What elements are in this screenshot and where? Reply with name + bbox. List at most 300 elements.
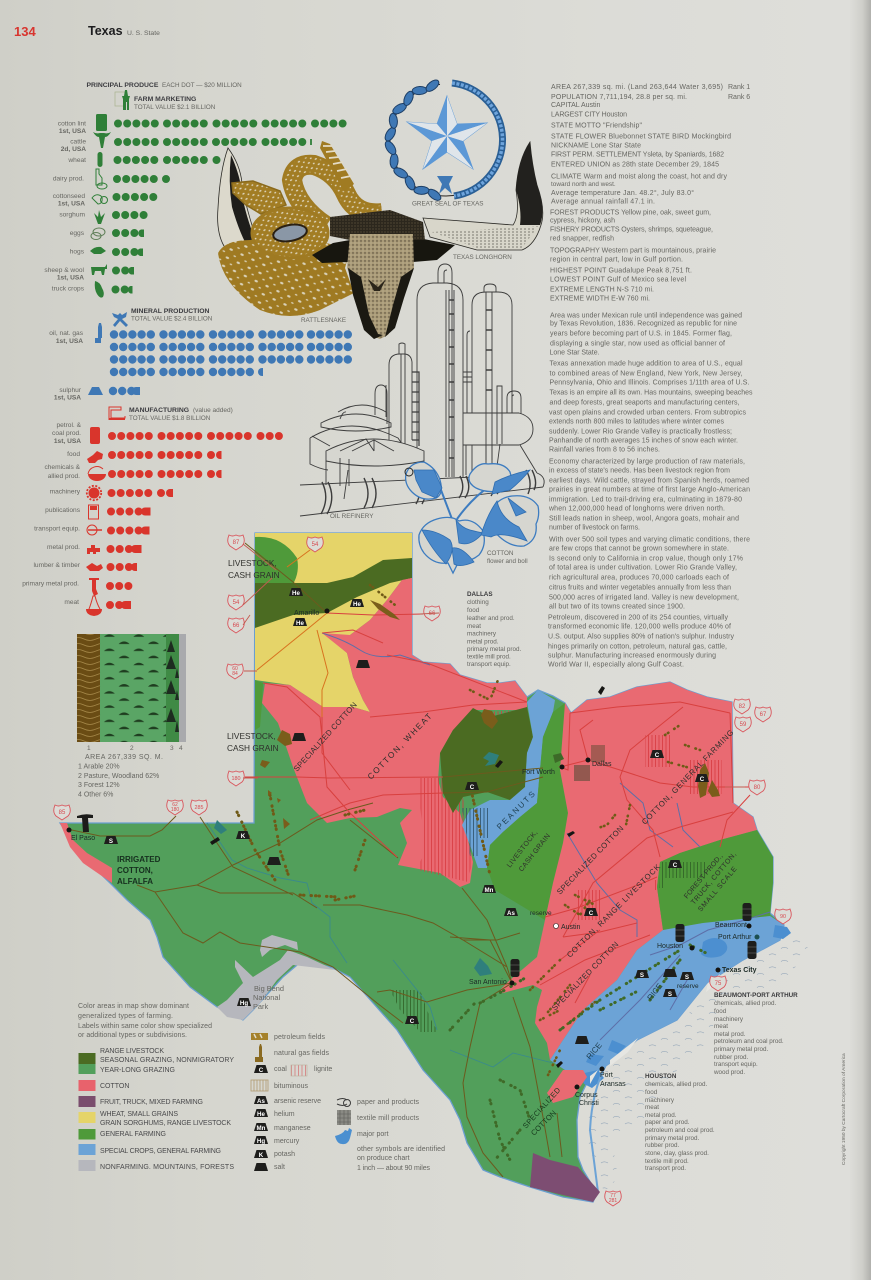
houston industry list [645, 1073, 715, 1172]
legend: mineral symbols: manganese [274, 1125, 311, 1132]
panel: descriptive text: Area was under Mexican rule until independence was gained [550, 312, 742, 320]
icon: textile mill [337, 1110, 351, 1125]
region: fruit, truck, mixed farming [530, 1153, 600, 1202]
panel: descriptive text: years before becoming part of U.S. in 1845. Former flag, [550, 330, 732, 338]
region: big bend nonfarming [217, 935, 335, 1020]
highway shields: 80 [754, 785, 761, 791]
beaumont-port arthur industry list: rubber prod. [714, 1054, 749, 1061]
legend: industry symbols: major port [357, 1131, 389, 1138]
panel: descriptive text: earliest days. Wild cattle, strayed from Spanish herds, roamed [549, 478, 749, 484]
icon: petroleum fields [251, 1033, 268, 1040]
panel: descriptive text: rich agricultural area, produces 70,000 carloads each of [549, 574, 729, 582]
beaumont-port arthur industry list: BEAUMONT-PORT ARTHUR [714, 992, 798, 999]
star [407, 96, 487, 169]
farm marketing heading: FARM MARKETING [134, 96, 196, 103]
state base: year-long grazing [60, 533, 784, 1202]
manufacturing rows: allied prod. [48, 473, 80, 480]
legend: mineral symbols: natural gas fields [274, 1050, 330, 1057]
farm row labels: cottonseed [53, 193, 85, 200]
mineral symbols: S [640, 972, 644, 979]
farming region labels: COTTON, WHEAT [365, 711, 434, 781]
houston industry list: primary metal prod. [645, 1135, 699, 1142]
legend: mineral symbols: coal [274, 1066, 287, 1073]
mineral symbols: C [589, 910, 594, 917]
mineral production heading [112, 308, 213, 327]
legend: industry symbols: paper and products [357, 1099, 420, 1106]
panel: state facts: FISHERY PRODUCTS Oysters, shrimps, squeteague, [550, 226, 713, 234]
mineral symbols: K [241, 833, 246, 840]
city labels: Port Arthur [718, 934, 752, 941]
chart axis numbers: 1 [87, 745, 91, 752]
city labels: Aransas [600, 1081, 626, 1088]
panel: descriptive text: Panhandle of north averages 15 inches of snow each winter. [549, 438, 738, 444]
houston industry list: meat [645, 1104, 659, 1111]
legend: farming types: COTTON [100, 1083, 129, 1090]
panel: descriptive text: suddenly. Lower Rio Grande Valley is practically frostless; [549, 428, 732, 436]
caption: rattlesnake: RATTLESNAKE [301, 317, 346, 324]
farm row labels: hogs [70, 248, 85, 256]
manufacturing rows: publications [45, 507, 81, 514]
farming region labels: SMALL SCALE [697, 866, 739, 913]
open flower [490, 496, 539, 546]
boll [419, 517, 484, 573]
panel: state facts: CAPITAL Austin [551, 102, 601, 109]
legend: mineral symbols: He [257, 1111, 266, 1118]
legend: mineral symbols: Mn [257, 1125, 266, 1132]
mineral rows: sulphur [59, 387, 82, 394]
panel: state facts [550, 84, 750, 302]
panel: state facts: EXTREME LENGTH N-S 710 mi. [550, 286, 654, 294]
farming region labels: LIVESTOCK, [506, 829, 539, 869]
beaumont-port arthur industry list: machinery [714, 1016, 744, 1023]
city labels: Christi [579, 1100, 599, 1107]
beaumont-port arthur industry list: primary metal prod. [714, 1046, 768, 1053]
panel: descriptive text: With over 500 soil types and varying climatic conditions, there [549, 536, 750, 544]
panel: state facts: region in central part, low in Gulf portion. [550, 256, 683, 264]
panel: descriptive text: Economy characterized by large production of raw materials, [549, 458, 745, 466]
legend note: or additional types or subdivisions. [78, 1032, 187, 1039]
illustration: longhorn horns [218, 142, 543, 254]
city labels: National [253, 993, 280, 1002]
panel: descriptive text: citrus fruits and winter vegetables annually from less than [549, 584, 731, 592]
mineral symbols: S [685, 974, 689, 981]
panel: state facts: Rank 1 [728, 84, 750, 91]
panel: descriptive text: extends north 800 miles to latitudes where winter comes [549, 418, 724, 426]
panel: descriptive text: Rainfall varies from 8 to 56 inches. [549, 446, 660, 454]
eye of coil [272, 222, 308, 244]
mineral symbols: Mn [485, 887, 494, 894]
manufacturing heading: (value added) [193, 407, 233, 414]
region: west cotton [262, 578, 527, 887]
middle coil [252, 208, 328, 258]
page number: 134 [14, 24, 36, 39]
city labels: Big Bend [254, 984, 284, 993]
legend: mineral symbols [251, 1033, 332, 1171]
dallas industry list: DALLAS [467, 591, 493, 598]
region: coastal special crops [550, 916, 784, 1077]
panel: descriptive text: to combined areas of New England, New York, New Jersey, [550, 370, 743, 378]
gulf of mexico waves [584, 932, 810, 1192]
chart heading: EACH DOT — $20 MILLION [162, 82, 242, 89]
houston industry list: metal prod. [645, 1112, 677, 1119]
city labels: El Paso [71, 835, 95, 842]
houston industry list: rubber prod. [645, 1142, 680, 1149]
farm row labels: 1st, USA [58, 200, 85, 208]
houston industry list: machinery [645, 1097, 675, 1104]
legend: industry symbols: on produce chart [357, 1155, 410, 1162]
farm row labels: cotton lint [58, 120, 86, 128]
rattle [320, 141, 354, 192]
illustration: oil refinery [300, 264, 544, 520]
highway shields: 66 [429, 611, 436, 617]
farm row labels: wheat [67, 157, 86, 164]
legend note: Color areas in map show dominant [78, 1003, 189, 1010]
panel: descriptive text: Petroleum, discovered in 200 of its 254 counties, virtually [548, 614, 728, 622]
panel: state facts: LOWEST POINT Gulf of Mexico sea level [550, 276, 686, 284]
panel: descriptive text: are few crops that cannot be grown somewhere in state. [549, 546, 729, 552]
farm row labels: eggs [70, 230, 85, 237]
beaumont-port arthur industry list: metal prod. [714, 1031, 746, 1038]
highway shields: 66 [233, 623, 240, 629]
highway shields: 60 [232, 666, 238, 672]
manufacturing rows: meat [64, 599, 79, 606]
panel: state facts: AREA 267,339 sq. mi. (Land 263,644 Water 3,695) [551, 84, 723, 91]
region: corpus christi cotton [547, 1070, 587, 1103]
highway shields: 62 [172, 802, 178, 808]
farming region labels: LIVESTOCK, [228, 558, 277, 568]
panel: state facts: FIRST PERM. SETTLEMENT Ysleta, by Spaniards, 1682 [551, 152, 724, 158]
lakes and rivers [207, 633, 700, 1067]
manufacturing rows: coal prod. [52, 430, 81, 437]
panel: state facts: red snapper, redfish [550, 236, 614, 242]
dallas industry list: clothing [467, 599, 489, 606]
houston industry list: HOUSTON [645, 1073, 677, 1080]
dallas industry list: meat [467, 623, 481, 630]
farming region labels: SPECIALIZED COTTON [292, 700, 359, 773]
mineral symbols: He [353, 601, 362, 608]
farming region labels: RICE [645, 982, 664, 1002]
manufacturing rows: lumber & timber [33, 562, 81, 569]
panel: principal produce chart [22, 82, 348, 616]
legend: mineral symbols: C [259, 1067, 264, 1074]
highway shields: 281 [609, 1198, 617, 1204]
map of Texas [54, 533, 791, 1206]
panel: descriptive text: all but two of its towns created since 1900. [549, 604, 685, 610]
legend: farming types [78, 1048, 234, 1171]
city labels: Austin [561, 924, 581, 931]
manufacturing rows: transport equip. [34, 526, 80, 532]
panel: descriptive text: Pennsylvania, Ohio and Illinois. Comprises 1/11th area of U.S. [550, 380, 750, 386]
illustration: cotton flower and boll [405, 462, 539, 573]
panel: state facts: CLIMATE Warm and moist along the coast, hot and dry [551, 174, 728, 180]
panel: descriptive text: vast open plains and crowded urban centers. From subtropics [549, 410, 746, 416]
farm row labels: sheep & wool [44, 267, 85, 274]
beaumont-port arthur industry list: meat [714, 1023, 728, 1030]
panel: state facts: NICKNAME Lone Star State [551, 142, 641, 150]
farming region labels: COTTON, [117, 866, 153, 875]
mineral rows: 1st, USA [56, 338, 83, 345]
chart axis numbers: 3 [170, 745, 174, 752]
region: forest products east [657, 830, 773, 930]
land use caption: 3 Forest 12% [78, 782, 120, 789]
panel: descriptive text: 500,000 acres of irrigated land. Valley is new development, [549, 594, 739, 602]
farming region labels: CASH GRAIN [228, 570, 280, 580]
legend: mineral symbols: mercury [274, 1138, 300, 1145]
farming region labels: COTTON, RANGE LIVESTOCK [565, 862, 662, 959]
dallas industry list: textile mill prod. [467, 654, 511, 660]
manufacturing rows: metal prod. [47, 544, 80, 551]
panel: descriptive text: sulphur. Manufacturing increased enormously during [548, 652, 716, 660]
farm marketing heading: TOTAL VALUE $2.1 BILLION [134, 104, 216, 111]
legend note [78, 1003, 212, 1039]
city labels: San Antonio [469, 979, 507, 986]
mineral production heading: TOTAL VALUE $2.4 BILLION [131, 316, 213, 322]
dallas industry list: leather and prod. [467, 615, 515, 622]
mineral production heading: MINERAL PRODUCTION [131, 308, 210, 315]
chart axis numbers [87, 745, 183, 752]
legend note: generalized types of farming. [78, 1013, 173, 1020]
chart heading: PRINCIPAL PRODUCE [86, 82, 159, 89]
icon: farmer [115, 90, 130, 110]
houston industry list: chemicals, allied prod. [645, 1081, 708, 1088]
chart axis numbers: 4 [179, 745, 183, 752]
region: peanuts special crops [462, 690, 555, 868]
highway shields: 90 [780, 914, 786, 920]
highway shields: 82 [739, 704, 746, 710]
farming region labels: RICE [585, 1041, 604, 1061]
chart axis numbers: 2 [130, 745, 134, 752]
manufacturing rows: petrol. & [56, 422, 82, 429]
farm row labels: 1st, USA [59, 128, 86, 135]
dallas industry list: transport equip. [467, 661, 511, 668]
region: wheat and grain sorghums [255, 533, 412, 712]
houston industry list: food [645, 1089, 658, 1096]
legend: industry symbols: textile mill products [357, 1115, 420, 1122]
panel: descriptive text: immigration. Led to trail-driving era, culminating in 1879-80 [549, 496, 742, 504]
region: range livestock central [440, 707, 533, 813]
panel: state facts: TOPOGRAPHY Western part is mountainous, prairie [550, 248, 716, 254]
farm row labels: 1st, USA [57, 274, 84, 282]
city labels: reserve [677, 983, 699, 990]
city labels: Beaumont [715, 922, 747, 929]
panel: state facts: Average annual rainfall 47.1 in. [551, 198, 655, 206]
city labels: Amarillo [294, 610, 319, 617]
hatch: lignite southwest [390, 990, 438, 1032]
panel: state facts: EXTREME WIDTH E-W 760 mi. [550, 296, 650, 302]
legend: industry symbols: 1 inch — about 90 miles [357, 1165, 430, 1172]
panel: descriptive text: transformed economic life. 120,000 wells produce 40% of [548, 624, 731, 630]
legend: industry symbols [335, 1098, 445, 1172]
title [88, 24, 160, 38]
panel: descriptive text [548, 312, 753, 668]
region: general farming northwest panhandle [255, 537, 298, 584]
city labels: Dallas [592, 761, 612, 768]
city labels: Port [600, 1072, 613, 1079]
panel: descriptive text: Still leads nation in sheep, wool, Angora goats, mohair and [549, 516, 739, 522]
icon: gas derrick [255, 1044, 263, 1062]
region: east cotton [500, 682, 757, 1060]
mineral symbols: As [507, 910, 516, 917]
mineral rows [49, 323, 348, 402]
land use caption: AREA 267,339 SQ. M. [85, 754, 163, 761]
icon: sulphur [88, 387, 103, 395]
title: U. S. State [127, 30, 160, 37]
upper loop [292, 165, 382, 226]
beaumont-port arthur industry list: food [714, 1008, 727, 1015]
legend: mineral symbols: petroleum fields [274, 1034, 326, 1041]
land use caption: 4 Other 6% [78, 792, 113, 798]
hatch: bituminous coal [418, 778, 472, 882]
panel: descriptive text: displaying a single star, now used as official banner of [550, 340, 725, 348]
barrier island [590, 1063, 607, 1192]
panel: state facts: ENTERED UNION as 28th state December 29, 1845 [551, 162, 719, 168]
dallas industry list: food [467, 607, 480, 614]
farming region labels: COTTON [529, 1108, 558, 1137]
highway shields: 180 [232, 776, 240, 782]
farming region labels [117, 558, 739, 1137]
houston industry list: paper and prod. [645, 1119, 690, 1126]
city labels: Texas City [722, 967, 757, 974]
panel: descriptive text: prairies in great numbers at time of first large Anglo-American [549, 486, 750, 494]
icon: crossed hammers [112, 312, 128, 327]
highway shields: 59 [740, 722, 747, 728]
caption: oil refinery: OIL REFINERY [330, 513, 374, 520]
panel: descriptive text: U.S. output. Also supplies 80% of nation's sulphur. Industry [548, 634, 734, 640]
panel: state facts: HIGHEST POINT Guadalupe Peak 8,751 ft. [550, 268, 692, 274]
wreath [381, 75, 511, 205]
panel: state facts: Average temperature Jan. 48.2°, July 83.0° [551, 189, 694, 197]
panel: descriptive text: when 12,000,000 head of longhorns were driven north. [548, 506, 725, 512]
caption: longhorn: TEXAS LONGHORN [453, 254, 512, 261]
legend: farming types: GRAIN SORGHUMS, RANGE LIVESTOCK [100, 1120, 231, 1127]
legend note: Labels within same color show specialized [78, 1023, 212, 1030]
legend: farming types: SPECIAL CROPS, GENERAL FARMING [100, 1148, 221, 1155]
seal caption: GREAT SEAL OF TEXAS [412, 200, 484, 208]
legend: farming types: SEASONAL GRAZING, NONMIGRATORY [100, 1057, 234, 1064]
bays [580, 925, 791, 1088]
farming region labels: TRUCK, COTTON, [690, 851, 738, 906]
manufacturing rows: primary metal prod. [22, 580, 79, 588]
mineral symbols: C [470, 784, 475, 791]
farming region labels: FOREST PROD., [683, 853, 725, 900]
region: livestock cash grain strip [487, 703, 568, 920]
oil and gas fields [237, 585, 720, 1160]
land use caption: 1 Arable 20% [78, 764, 120, 770]
panel: descriptive text: Texas annexation made huge addition to area of U.S., equal [550, 360, 743, 368]
city labels: reserve [530, 910, 552, 917]
farm row labels: sorghum [59, 212, 86, 218]
city labels [71, 610, 757, 1107]
highway shields: 77 [610, 1193, 616, 1199]
mineral rows: 1st, USA [54, 394, 81, 402]
panel: descriptive text: in excess of state's needs. Has been livestock region from [549, 468, 730, 474]
highway shields: 54 [312, 542, 319, 548]
panel: descriptive text: hinges primarily on cotton, petroleum, natural gas, cattle, [548, 644, 727, 650]
city markers [66, 608, 760, 1090]
icon: paper rolls [337, 1098, 347, 1106]
houston industry list: transport prod. [645, 1165, 686, 1172]
chart heading [86, 82, 242, 89]
flower buds [406, 462, 441, 499]
legend: farming types: RANGE LIVESTOCK [100, 1048, 164, 1055]
icon: major port [335, 1128, 352, 1144]
panel: descriptive text: Lone Star State. [550, 350, 600, 356]
manufacturing rows: food [67, 451, 80, 458]
legend: farming types: GENERAL FARMING [100, 1131, 166, 1138]
land use caption [78, 754, 163, 798]
city labels: Park [253, 1002, 269, 1011]
highway shields: 54 [233, 600, 240, 606]
farming region labels: CASH GRAIN [227, 743, 279, 753]
mineral symbols: C [673, 862, 678, 869]
legend: farming types: NONFARMING. MOUNTAINS, FORESTS [100, 1164, 234, 1171]
panel: descriptive text: Is second only to California in crop value, though only 17% [549, 556, 743, 562]
highway shields [54, 535, 791, 1206]
houston industry list: petroleum and coal prod. [645, 1127, 715, 1134]
icon: oil derrick [95, 323, 102, 343]
mineral symbols: C [655, 752, 660, 759]
panel: state facts: LARGEST CITY Houston [551, 112, 627, 118]
highway shields: 87 [233, 540, 240, 546]
panel: descriptive text: Texas is an empire all its own. Has mountains, sweeping beaches [550, 390, 753, 396]
farm row labels: 2d, USA [61, 146, 86, 153]
mineral symbols [77, 588, 756, 1068]
manufacturing heading: TOTAL VALUE $1.8 BILLION [129, 415, 211, 422]
panel: state facts: STATE FLOWER Bluebonnet STATE BIRD Mockingbird [551, 134, 731, 140]
farm row labels: cattle [70, 138, 86, 146]
illustration: longhorn head [312, 210, 455, 339]
farming region labels: LIVESTOCK, [227, 731, 276, 741]
beaumont-port arthur industry list: petroleum and coal prod. [714, 1038, 784, 1045]
coil body [218, 235, 354, 316]
illustration: rattlesnake [218, 141, 382, 316]
panel: state facts: Rank 6 [728, 94, 750, 101]
highway shields: 285 [194, 805, 204, 811]
road network [67, 543, 770, 1177]
region: general farming sliver [255, 680, 263, 730]
mineral rows: oil, nat. gas [49, 330, 84, 337]
panel: state facts: FOREST PRODUCTS Yellow pine, oak, sweet gum, [550, 210, 711, 216]
farm row labels: dairy prod. [53, 176, 84, 182]
beaumont-port arthur industry list: chemicals, allied prod. [714, 1000, 777, 1007]
illustration: cotton flower and boll: flower and boll [487, 558, 528, 565]
farming region labels: COTTON, GENERAL FARMING [640, 728, 735, 826]
tanks and pipeline [300, 405, 544, 516]
legend: farming types: YEAR-LONG GRAZING [100, 1067, 175, 1074]
panel: descriptive text: and deep forests, great seaports and manufacturing centers, [550, 400, 740, 406]
legend: mineral symbols: Hg [257, 1138, 265, 1145]
dallas industry list: machinery [467, 630, 497, 638]
farm icons [90, 114, 111, 298]
region: el paso cotton [60, 823, 112, 883]
city labels: Corpus [575, 1092, 598, 1099]
icon: factory [109, 407, 125, 420]
panel: descriptive text: of total area is under cultivation. Lower Rio Grande Valley, [549, 564, 737, 572]
highway shields: 67 [760, 712, 767, 718]
illustration: great seal of Texas [381, 75, 511, 208]
mineral symbols: C [700, 776, 705, 783]
dallas industry list: primary metal prod. [467, 646, 521, 653]
copyright line: Copyright 1950 by Cartocraft Corporation of America [841, 1053, 847, 1165]
farm marketing heading [134, 96, 216, 111]
mineral symbols: He [292, 590, 301, 597]
beaumont-port arthur industry list: transport equip. [714, 1061, 758, 1068]
legend: mineral symbols: helium [274, 1111, 295, 1118]
legend: mineral symbols: lignite [314, 1066, 332, 1073]
dallas industry list [467, 591, 521, 668]
farm row labels: truck crops [52, 286, 85, 292]
farming region labels: SPECIALIZED [521, 1085, 563, 1130]
